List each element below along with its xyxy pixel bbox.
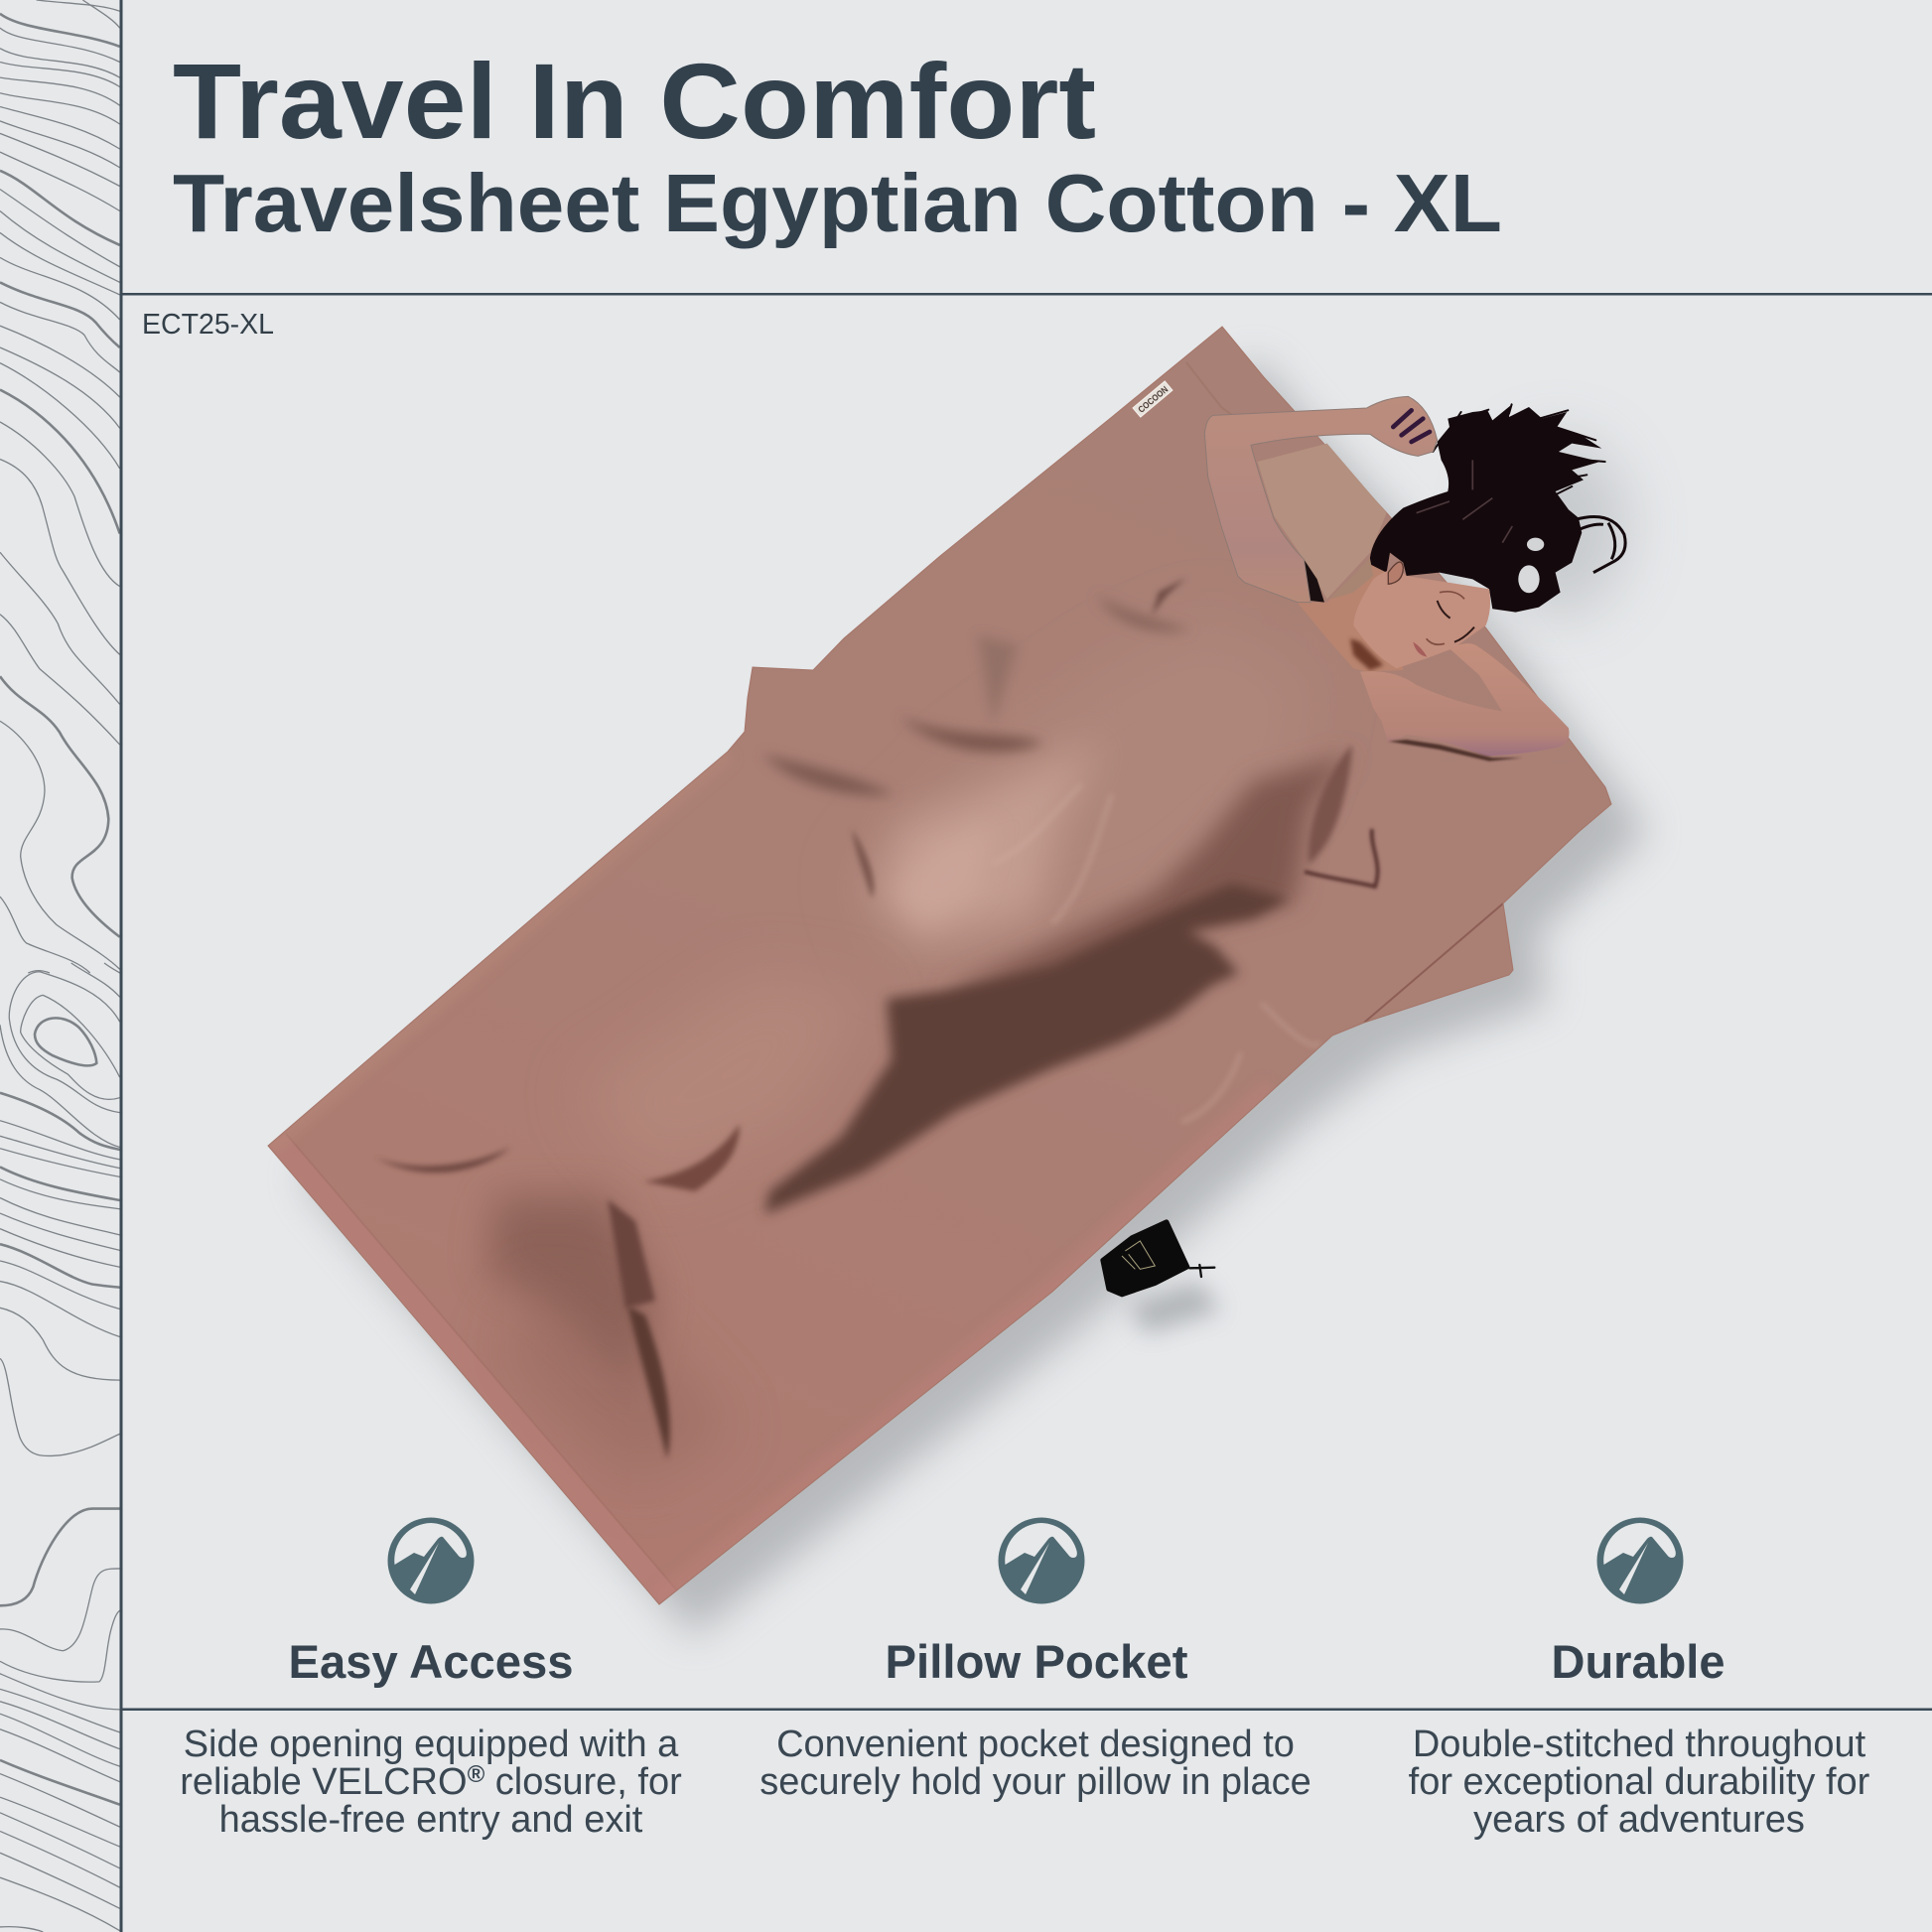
heading: easy access: Easy Access — [288, 1635, 574, 1688]
upper folds — [899, 717, 1044, 752]
face features — [1438, 601, 1474, 642]
neck shadow — [1350, 638, 1383, 670]
pouch label — [1122, 1241, 1155, 1269]
dark body fold band — [764, 884, 1291, 1214]
soft body fold band — [963, 752, 1339, 983]
underarm hair shadow — [1304, 559, 1324, 603]
crescent fold — [643, 1124, 740, 1191]
icon: mountain 1 — [387, 1517, 475, 1604]
icon: mountain 2 — [999, 1517, 1084, 1604]
hem along long edges — [659, 1089, 1274, 1604]
text: durable — [1409, 1724, 1870, 1841]
raised arm — [1204, 396, 1438, 603]
header rule — [121, 293, 1932, 296]
features rule — [121, 1708, 1932, 1711]
text: pillow pocket — [759, 1724, 1311, 1803]
text: durable: Double-stitched throughout — [1413, 1724, 1866, 1765]
head-end stitching — [1185, 362, 1231, 414]
product code: ECT25-XL — [142, 309, 274, 341]
hair strands — [1433, 404, 1605, 496]
heading: pillow pocket: Pillow Pocket — [886, 1635, 1188, 1688]
text: easy access: ® — [468, 1761, 485, 1788]
text: easy access: closure, for — [484, 1761, 682, 1803]
neck and chest — [1298, 563, 1403, 672]
hair highlights — [1417, 460, 1512, 543]
hair — [1370, 405, 1601, 613]
subtitle: Travelsheet Egyptian Cotton - XL — [173, 157, 1502, 249]
text: easy access: Side opening equipped with a — [184, 1724, 679, 1765]
ear — [1388, 562, 1403, 584]
fingers — [1393, 410, 1430, 442]
lit body highlight — [876, 753, 1086, 946]
text: pillow pocket: Convenient pocket designed to — [776, 1724, 1295, 1765]
vertical rule — [119, 0, 123, 1932]
lower body highlight — [641, 1015, 802, 1132]
long crease — [627, 1306, 670, 1459]
text: easy access: hassle-free entry and exit — [219, 1799, 643, 1841]
text: easy access — [180, 1724, 682, 1841]
heading: durable: Durable — [1551, 1635, 1725, 1688]
hair curls — [1572, 516, 1625, 573]
text: durable: years of adventures — [1473, 1799, 1805, 1841]
soft light ridges — [1055, 812, 1318, 1122]
text: easy access: reliable VELCRO — [180, 1761, 468, 1803]
hair gaps — [1527, 538, 1544, 551]
topographic contour strip: lower — [0, 963, 120, 1932]
stuff sack pouch — [1103, 1222, 1221, 1333]
brand tag: COCOON — [1136, 384, 1170, 415]
text: pillow pocket: securely hold your pillow in place — [759, 1761, 1311, 1803]
crease near foot — [374, 1147, 511, 1173]
right flap crease — [1364, 903, 1503, 1023]
sheet drop shadow — [302, 358, 1645, 1636]
title: Travel In Comfort — [173, 41, 1096, 161]
topographic contour strip: upper — [0, 0, 120, 973]
sheet edge — [268, 327, 1611, 1604]
lower sheet shadow — [486, 1196, 655, 1390]
hem along foot — [469, 1349, 606, 1509]
face — [1353, 570, 1490, 668]
arm shadow — [1388, 740, 1522, 761]
right side fold — [1309, 745, 1352, 864]
pillow area — [1258, 444, 1387, 599]
sleeping woman — [1204, 396, 1625, 761]
text: durable: for exceptional durability for — [1409, 1761, 1870, 1803]
broad cover tone — [854, 616, 1320, 973]
travel sheet — [268, 327, 1611, 1604]
shoulder behind neck — [1328, 559, 1373, 600]
lower arm — [1360, 643, 1570, 757]
icon: mountain 3 — [1596, 1517, 1684, 1604]
